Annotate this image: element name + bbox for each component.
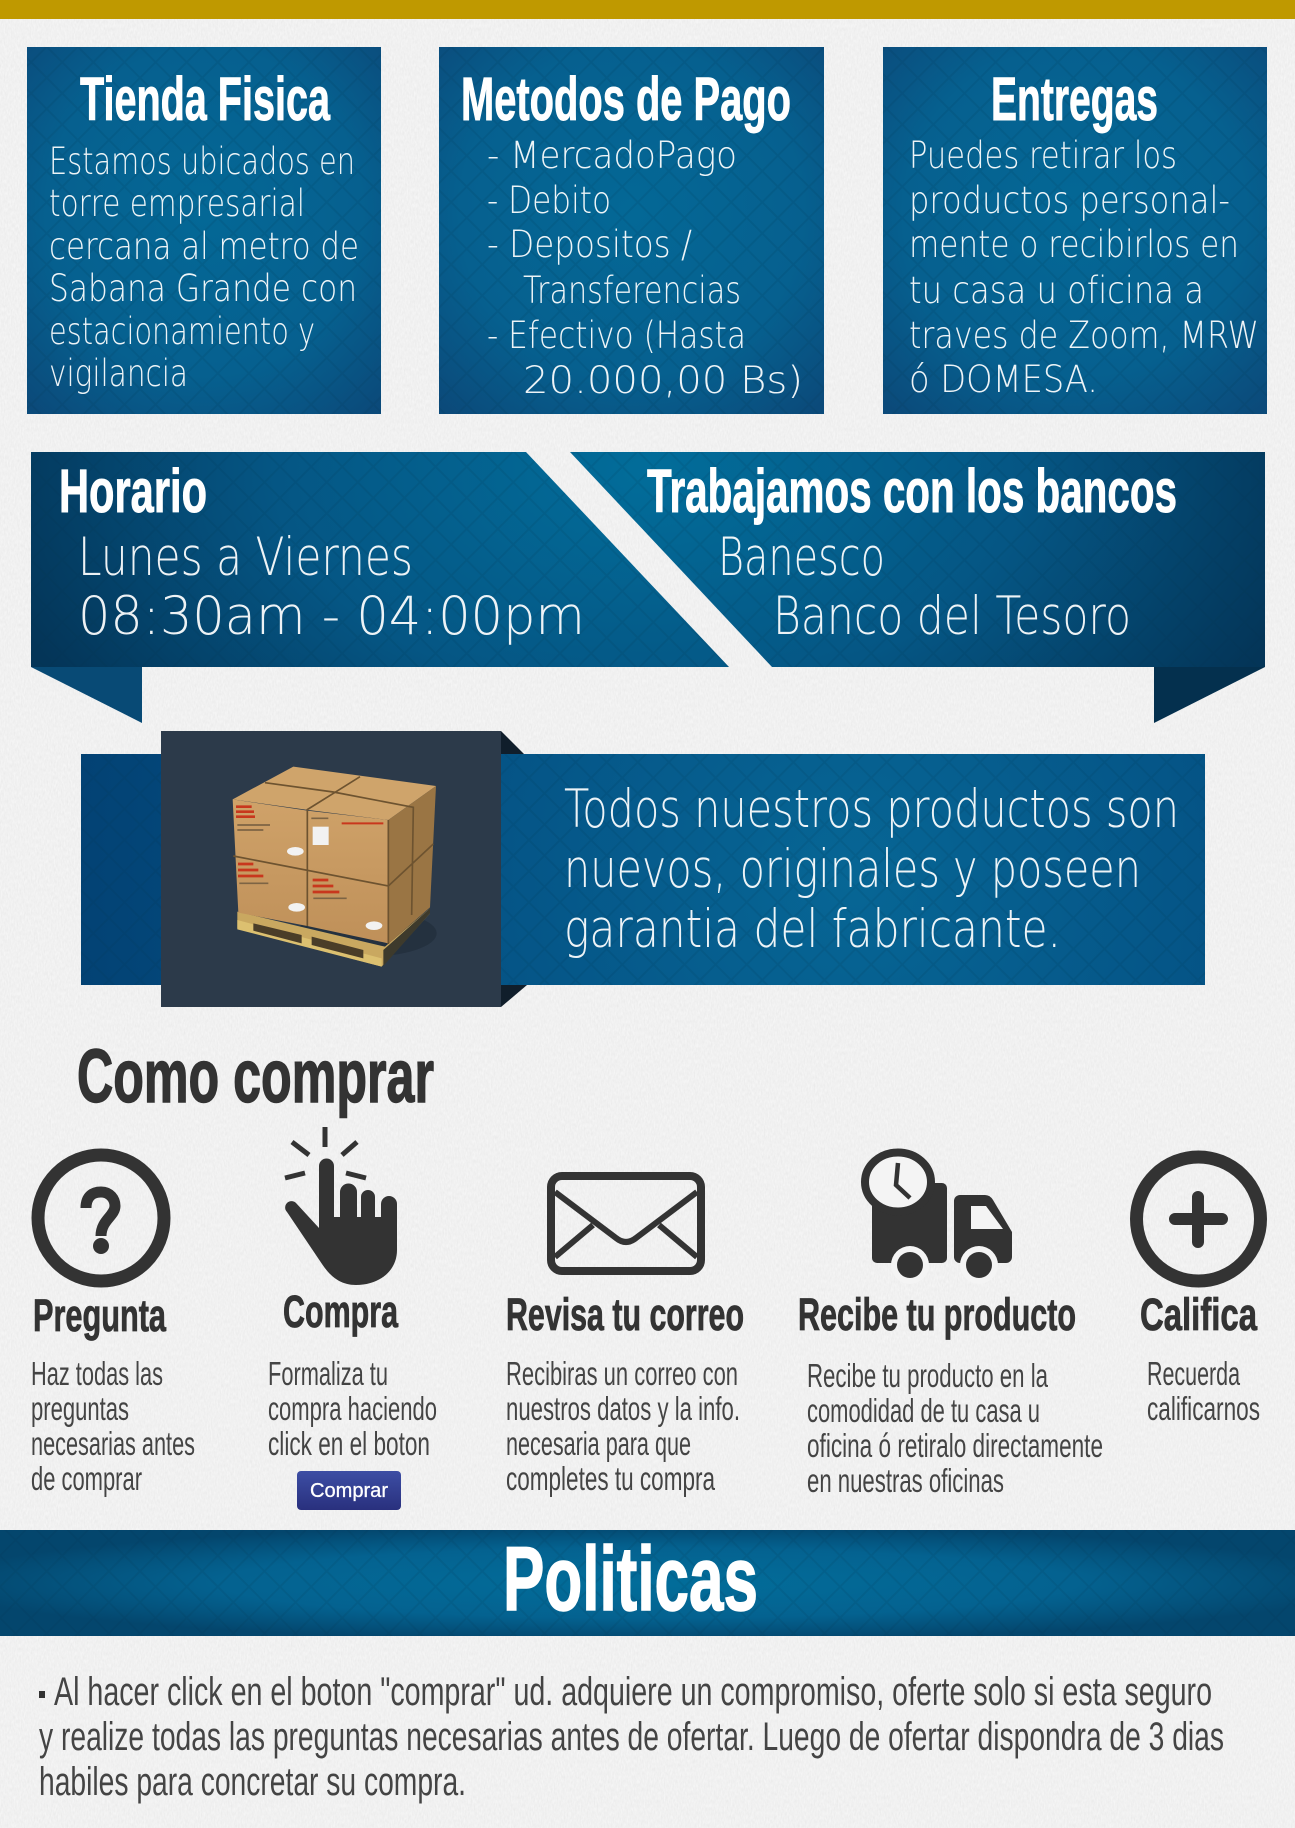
list: metodos de pago: - Efectivo (Hasta (487, 314, 746, 357)
text: compra: click en el boton (268, 1425, 430, 1462)
button: comprar: Comprar (310, 1480, 388, 1502)
text: recibe tu producto: comodidad de tu casa u (807, 1392, 1040, 1429)
list: metodos de pago: - Depositos / (487, 223, 692, 266)
text: revisa tu correo: Recibiras un correo con (506, 1355, 738, 1392)
text: recibe tu producto: Recibe tu producto en la (807, 1357, 1048, 1394)
text: horario (78, 527, 585, 647)
text: tienda fisica: Estamos ubicados en (49, 140, 355, 183)
panel: tienda fisica (27, 47, 381, 414)
text: tienda fisica: Sabana Grande con (49, 267, 357, 310)
heading: pregunta: Pregunta (33, 1290, 167, 1341)
banner: horario (31, 452, 729, 723)
text: entregas: ó DOMESA. (909, 358, 1098, 401)
icon: pointing hand (285, 1127, 397, 1285)
step: recibe tu producto (798, 1152, 1103, 1499)
icon: delivery truck with clock (865, 1152, 1012, 1284)
icon: plus (1136, 1157, 1260, 1281)
heading: revisa tu correo: Revisa tu correo (506, 1289, 744, 1340)
text: revisa tu correo (506, 1355, 740, 1497)
text: entregas: mente o recibirlos en (909, 223, 1239, 266)
text: tienda fisica: cercana al metro de (49, 225, 359, 268)
list: metodos de pago: - Debito (487, 179, 611, 222)
list: metodos de pago: 20.000,00 Bs) (523, 359, 803, 402)
heading: compra: Compra (283, 1286, 399, 1337)
ribbon tail: left (31, 667, 142, 723)
text: compra (268, 1355, 437, 1462)
text: productos: garantia del fabricante. (564, 899, 1061, 960)
text: compra: Formaliza tu (268, 1355, 388, 1392)
text: tienda fisica: torre empresarial (49, 182, 305, 225)
text: califica (1147, 1355, 1260, 1427)
text: recibe tu producto: en nuestras oficinas (807, 1462, 1004, 1499)
text: entregas: productos personal- (909, 179, 1230, 222)
list: metodos de pago: Transferencias (523, 269, 741, 312)
text: productos (564, 779, 1179, 960)
panel: productos (81, 731, 1205, 1007)
heading: como comprar: Como comprar (77, 1034, 434, 1118)
heading: metodos de pago: Metodos de Pago (461, 65, 791, 133)
text: entregas: Puedes retirar los (909, 134, 1177, 177)
text: horario: Lunes a Viernes (78, 527, 413, 588)
band: politicas (0, 1529, 1295, 1636)
panel: metodos de pago (439, 47, 824, 414)
heading: entregas: Entregas (991, 65, 1158, 133)
heading: politicas: Politicas (503, 1529, 758, 1630)
panel: entregas (883, 47, 1267, 414)
heading: recibe tu producto: Recibe tu producto (798, 1289, 1076, 1340)
text: bancos (718, 527, 1131, 647)
step: pregunta (31, 1155, 195, 1497)
top gold bar (0, 0, 1295, 19)
button: comprar (297, 1471, 401, 1510)
text: pregunta: necesarias antes (31, 1425, 195, 1462)
text: califica: Recuerda (1147, 1355, 1240, 1392)
icon: question mark (38, 1155, 164, 1281)
text: pregunta: preguntas (31, 1390, 129, 1427)
step: revisa tu correo (506, 1176, 744, 1497)
text: revisa tu correo: nuestros datos y la info. (506, 1390, 740, 1427)
text: revisa tu correo: necesaria para que (506, 1425, 691, 1462)
text: entregas: tu casa u oficina a (909, 269, 1204, 312)
text: bancos: Banesco (718, 527, 885, 588)
text: productos: nuevos, originales y poseen (564, 839, 1141, 900)
list: metodos de pago: - MercadoPago (487, 134, 737, 177)
step: califica (1136, 1157, 1260, 1427)
text: tienda fisica: estacionamiento y (49, 310, 315, 353)
text: pregunta: de comprar (31, 1460, 142, 1497)
text: recibe tu producto: oficina ó retiralo directamente (807, 1427, 1103, 1464)
heading: tienda fisica: Tienda Fisica (80, 65, 331, 133)
text: politicas: habiles para concretar su compra. (39, 1760, 466, 1804)
text: revisa tu correo: completes tu compra (506, 1460, 715, 1497)
text: entregas (909, 134, 1259, 401)
text: tienda fisica: vigilancia (49, 352, 188, 395)
icon: boxes on pallet (233, 767, 437, 967)
list: metodos de pago (487, 134, 803, 402)
heading: horario: Horario (59, 457, 207, 525)
text: pregunta (31, 1355, 195, 1497)
text: bancos: Banco del Tesoro (773, 586, 1131, 647)
text: pregunta: Haz todas las (31, 1355, 163, 1392)
text: recibe tu producto (807, 1357, 1103, 1499)
text: horario: 08:30am - 04:00pm (78, 586, 585, 647)
ribbon tail: right (1154, 667, 1265, 723)
text: politicas (39, 1670, 1224, 1804)
text: compra: compra haciendo (268, 1390, 437, 1427)
banner: bancos (570, 452, 1265, 723)
text: tienda fisica (49, 140, 359, 395)
step: compra (268, 1127, 437, 1510)
icon: envelope (551, 1176, 701, 1271)
